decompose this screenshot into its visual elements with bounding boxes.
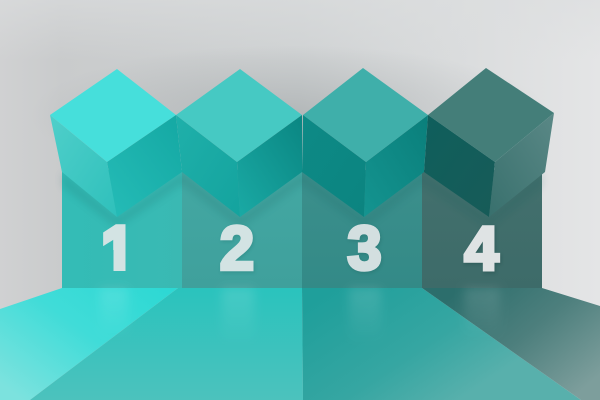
panel: floor <box>0 288 600 400</box>
number 3: 3 <box>348 216 383 285</box>
number 2: 2 <box>221 216 255 285</box>
cube 4 <box>424 68 554 217</box>
cube 1 <box>50 69 182 217</box>
number 4: 4 <box>464 214 499 284</box>
number 4: 4 <box>465 216 500 285</box>
panel: wall columns <box>62 170 542 288</box>
cube shadows on wall <box>62 172 542 228</box>
number 1: 1 <box>102 214 136 282</box>
number 3: 3 <box>347 214 382 284</box>
number 2: 2 <box>220 214 254 284</box>
cube 2 <box>176 69 302 217</box>
cube 3 <box>302 68 428 217</box>
